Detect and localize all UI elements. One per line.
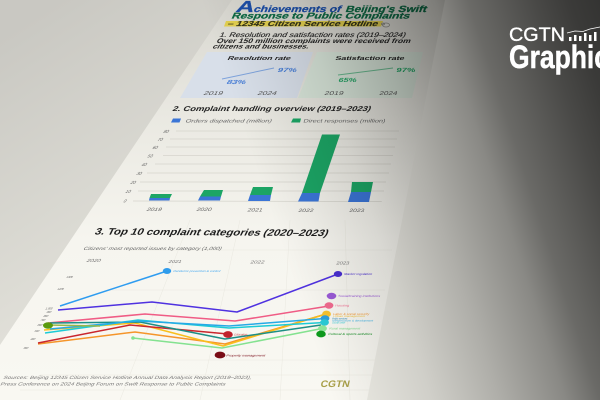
- sources: Sources: Beijing 12345 Citizen Service Hotline Annual Data Analysis Report (2019–2023),: [2, 375, 253, 381]
- label: public services: Public services: [332, 317, 348, 320]
- label: market regulation: Market regulation: [344, 272, 373, 276]
- logo: CGTN Graphics: CGTN: [509, 24, 565, 46]
- bar chart: 70: [156, 137, 164, 143]
- label: property management: [215, 352, 266, 358]
- bar chart: 10: [124, 189, 132, 195]
- label: labor and social security: [322, 311, 370, 318]
- bar chart: 0: [122, 199, 128, 204]
- label: social institutions: [327, 293, 381, 299]
- label: cultural and sports: [316, 331, 373, 337]
- legend: Direct responses (million): [302, 119, 387, 124]
- line chart: 2021: [168, 259, 183, 264]
- panel: satisfaction rate: 2019: [323, 91, 344, 97]
- icon: phone: [382, 23, 390, 27]
- panel: resolution rate: Resolution rate: [226, 56, 293, 62]
- line chart: 500: [33, 329, 41, 333]
- panel: resolution rate: 83%: [225, 79, 248, 86]
- infographic sheet content: [0, 0, 429, 390]
- label: housing: Housing: [335, 304, 350, 307]
- section 1 heading: 1. Resolution and satisfaction rates (2019–2024): [218, 32, 407, 39]
- line chart: 2020: [85, 258, 103, 264]
- bar chart: 80: [162, 129, 170, 135]
- label: pandemic prevention: Pandemic prevention & control: [173, 269, 222, 273]
- label: cultural and sports: Cultural & sports activities: [328, 332, 373, 336]
- label: public services: Infrastructure & development: [332, 319, 374, 322]
- CGTN footer mark: CGTN: [319, 379, 351, 390]
- line chart: [22, 258, 381, 358]
- section 1 description: Over 150 million complaints were received from: [215, 38, 412, 45]
- label: rural management: [318, 325, 361, 332]
- label: labor and social security: Urban management: [333, 314, 366, 318]
- bar chart: 60: [151, 145, 159, 151]
- label: property management: Property management: [226, 354, 266, 357]
- line chart: 400: [29, 337, 37, 341]
- label: pandemic prevention: [163, 268, 222, 274]
- title: [230, 0, 429, 20]
- line chart: 700: [39, 318, 47, 322]
- line chart: 1300: [65, 275, 74, 279]
- label: education: Education: [234, 333, 248, 336]
- title: Beijing's Swift: [344, 4, 429, 14]
- bar chart: 2019: [145, 207, 163, 213]
- bar chart: 2021: [246, 208, 264, 213]
- line chart: 900: [45, 310, 53, 314]
- title: Response to Public Complaints: [230, 11, 413, 20]
- sources: [0, 375, 253, 387]
- label: education: [223, 331, 248, 338]
- line chart: 300: [22, 346, 30, 350]
- label: social order: Social order: [332, 321, 346, 324]
- label: market regulation: [334, 271, 373, 277]
- line chart: 2022: [250, 260, 266, 264]
- label: public services: [321, 315, 374, 322]
- section 3 heading: 3. Top 10 complaint categories (2020–2023): [93, 227, 331, 239]
- label: social institutions: Social/training institutions: [338, 294, 381, 298]
- icon: bar trend: [567, 27, 600, 41]
- bar chart: 2020: [195, 207, 213, 213]
- bar chart: [122, 129, 399, 214]
- panel: resolution rate: 97%: [276, 67, 299, 74]
- title: chievements of: [252, 4, 344, 14]
- subtitle highlight: [224, 19, 383, 28]
- label: labor and social security: Labor & social security: [333, 312, 370, 316]
- bar chart: 50: [146, 154, 154, 159]
- bar chart: 20: [129, 180, 137, 186]
- panel: resolution rate: 2019: [202, 91, 225, 97]
- panel: resolution rate: 2024: [256, 91, 279, 97]
- panel: satisfaction rate: 2024: [378, 91, 398, 97]
- bar chart: 2022: [297, 208, 315, 214]
- legend: [171, 118, 387, 124]
- bar chart: 40: [140, 162, 148, 168]
- bar chart: 2023: [348, 208, 365, 214]
- section 1 description: [211, 38, 412, 50]
- panel: resolution rate: [180, 52, 313, 98]
- section 1 description: citizens and businesses.: [211, 43, 311, 50]
- line chart: 1,000: [44, 307, 54, 310]
- label: social order: [320, 319, 346, 326]
- legend: Orders dispatched (million): [184, 119, 273, 124]
- line chart: 1200: [56, 287, 65, 291]
- panel: satisfaction rate: [298, 52, 423, 98]
- sources: Press Conference on 2024 Beijing Forum on Swift Response to Public Complaints: [0, 382, 228, 387]
- line chart: 800: [42, 314, 50, 318]
- chart subtitle: Citizens' most reported issues by category (1,000): [82, 246, 224, 252]
- label: rural management: Rural management: [329, 327, 361, 330]
- panel: satisfaction rate: 97%: [396, 67, 417, 74]
- panel: satisfaction rate: Satisfaction rate: [334, 56, 405, 62]
- line chart: 600: [36, 323, 44, 327]
- bar chart: 30: [135, 171, 143, 177]
- section 2 heading: 2. Complaint handling overview (2019–2023): [171, 104, 374, 113]
- line chart: 2023: [336, 261, 351, 265]
- panel: satisfaction rate: 65%: [337, 77, 358, 84]
- subtitle highlight: – 12345 Citizen Service Hotline: [226, 19, 380, 28]
- label: housing: [325, 302, 350, 309]
